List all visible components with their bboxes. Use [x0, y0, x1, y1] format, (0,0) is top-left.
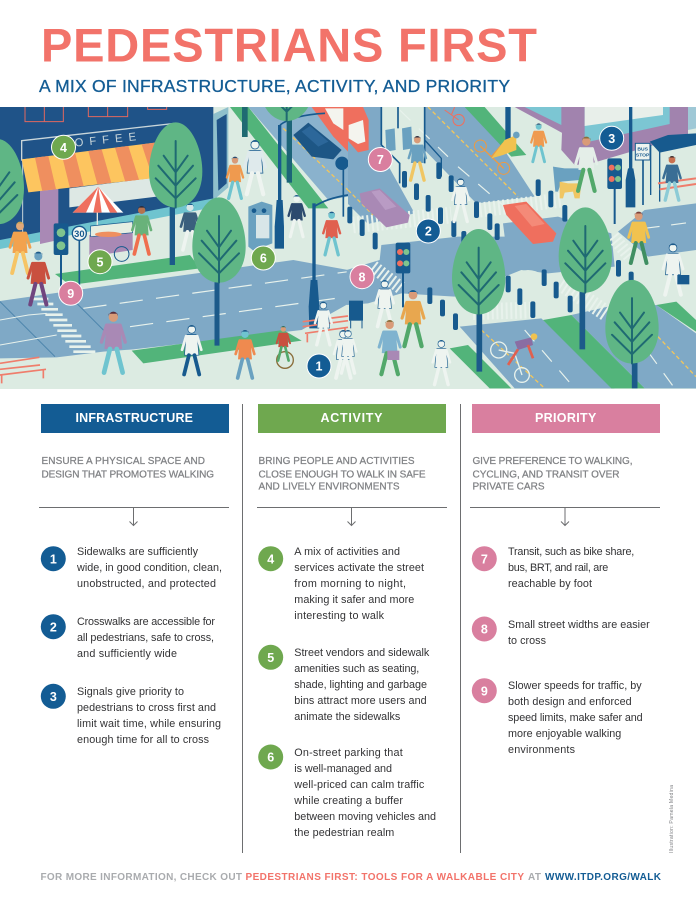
marker 2: 2: [425, 225, 432, 239]
bike share sign: [335, 157, 349, 217]
road lane markings: [83, 272, 348, 327]
orange bike and rider: [474, 132, 520, 174]
red bus front: [347, 107, 369, 152]
crosswalks: [353, 200, 630, 313]
activity description: BRING PEOPLE AND ACTIVITIES: [258, 456, 415, 467]
infrastructure heading: INFRASTRUCTURE: [76, 411, 193, 425]
marker 8: 8: [359, 270, 366, 284]
priority description: GIVE PREFERENCE TO WALKING,: [472, 456, 632, 467]
marker 8: [350, 265, 374, 289]
item 7: Transit, such as bike share,: [508, 546, 634, 558]
item 5: amenities such as seating,: [294, 663, 419, 675]
marker 6: 6: [260, 252, 267, 266]
parking meter: [248, 202, 272, 251]
item 6: is well-managed and: [294, 763, 392, 775]
item 7: reachable by foot: [508, 578, 592, 590]
illustration credit: Illustration: Pamela Medina: [669, 785, 675, 853]
item 7: 7: [481, 552, 488, 566]
item 6: 6: [267, 751, 274, 765]
footer: AT: [528, 872, 541, 883]
item 8: to cross: [508, 635, 547, 647]
outline man with bag: [182, 325, 201, 374]
man behind the tree: [181, 203, 199, 250]
sidewalk tree: [192, 197, 246, 346]
item 3: 3: [50, 690, 57, 704]
panel: activity: [257, 404, 447, 839]
item 5: [258, 645, 430, 723]
item 9: more enjoyable walking: [508, 728, 621, 740]
activity description: [258, 456, 426, 492]
woman in red dress: [323, 212, 340, 255]
item 1: 1: [50, 552, 57, 566]
item 4: interesting to walk: [294, 610, 385, 622]
outline pedestrian at edge: [334, 330, 353, 378]
activity arrow: [257, 508, 447, 526]
item 7: bus, BRT, and rail, are: [508, 562, 608, 574]
item 3: [41, 684, 221, 746]
marker 6: [251, 246, 275, 270]
transit station platform and fare gates: [385, 127, 412, 152]
item 7: [472, 546, 634, 590]
marker 5: [88, 250, 112, 274]
outline pedestrian on crossing: [452, 178, 469, 222]
item 2: 2: [50, 620, 57, 634]
left half of the street scene: [0, 36, 353, 383]
vendor in green apron: [132, 206, 151, 254]
footer: [40, 872, 662, 883]
item 2: Crosswalks are accessible for: [77, 616, 215, 628]
bus stop sign: BUS: [637, 146, 649, 152]
road markings: [348, 107, 696, 388]
marker 1: 1: [316, 360, 323, 374]
outline man with briefcase: [663, 243, 689, 295]
item 9: speed limits, make safer and: [508, 712, 643, 724]
outline pedestrian with backpack: [244, 140, 266, 194]
item 2: all pedestrians, safe to cross,: [77, 632, 214, 644]
benches: [0, 316, 348, 383]
item 3: pedestrians to cross first and: [77, 702, 216, 714]
bollards: [347, 162, 634, 330]
man in red jacket: [28, 252, 49, 304]
item 2: [41, 614, 215, 660]
outline woman by the bench: [315, 302, 332, 345]
panel: infrastructure: [39, 404, 229, 746]
priority heading: PRIORITY: [535, 411, 597, 425]
pedestrians on the right side: [340, 123, 689, 385]
striped awning: [22, 143, 167, 192]
outline pedestrian at left edge: [340, 330, 356, 373]
purple car: [360, 188, 410, 227]
pedestrian with backpack: [402, 290, 424, 346]
street illustration: [0, 107, 696, 389]
marker 3: [600, 126, 624, 150]
item 5: shade, lighting and garbage: [294, 679, 427, 691]
item 9: [472, 678, 643, 756]
subtitle: A MIX OF INFRASTRUCTURE, ACTIVITY, AND PRIORITY: [39, 76, 510, 96]
item 4: [258, 546, 424, 622]
woman in orange top: [227, 157, 243, 198]
sidewalk bulge at the intersection: [508, 270, 548, 303]
red car: [503, 202, 556, 244]
footer: PEDESTRIANS FIRST: TOOLS FOR A WALKABLE CITY: [246, 872, 524, 883]
item 1: unobstructed, and protected: [77, 578, 216, 590]
item 3: limit wait time, while ensuring: [77, 718, 221, 730]
item 4: services activate the street: [294, 562, 424, 574]
tree at left edge: [0, 139, 24, 224]
trees on the left side: [0, 36, 313, 346]
priority description: PRIVATE CARS: [472, 481, 545, 492]
streets: [347, 107, 696, 388]
bus lane continuation: [348, 107, 415, 224]
intersection tree: [452, 229, 505, 372]
priority heading: [472, 404, 660, 433]
green planting strips: [450, 107, 696, 388]
lower right tree: [605, 280, 659, 388]
marker 4: [52, 135, 76, 159]
item 6: between moving vehicles and: [294, 811, 436, 823]
east road: [618, 203, 696, 257]
marker 7: [368, 148, 392, 172]
man walking dogs: [576, 137, 597, 191]
item 5: bins attract more users and: [294, 695, 427, 707]
man seated at bus stop: [663, 156, 681, 200]
marker 7: 7: [377, 153, 384, 167]
trash bin: [349, 301, 363, 328]
lower right road: [571, 305, 696, 388]
woman in yellow coat: [629, 212, 649, 263]
marker 1: [307, 354, 331, 378]
item 6: the pedestrian realm: [294, 827, 394, 839]
crosswalk: [33, 299, 95, 352]
marker 3: 3: [608, 132, 615, 146]
diagonal street upper left: [248, 107, 348, 200]
item 8: [472, 616, 650, 647]
shop front tree: [149, 122, 202, 265]
item 6: On-street parking that: [294, 747, 403, 759]
panel: priority: [470, 404, 660, 756]
crossing tree: [559, 207, 612, 349]
woman with tote: [10, 222, 30, 273]
foreground cyclist: [491, 333, 537, 382]
item 5: animate the sidewalks: [294, 711, 401, 723]
green planting strips: [55, 107, 328, 363]
outline woman near signal: [376, 280, 394, 327]
item 5: Street vendors and sidewalk: [294, 647, 430, 659]
pedestrians on the left side: [10, 140, 353, 378]
traffic signal left: [54, 223, 68, 287]
purple corner building: [515, 107, 696, 165]
activity description: AND LIVELY ENVIRONMENTS: [258, 481, 400, 492]
marker 2: [416, 219, 440, 243]
activity heading: ACTIVITY: [320, 411, 383, 425]
red bus: [312, 107, 348, 152]
man with purple briefcase: [379, 320, 400, 374]
item 4: making it safer and more: [294, 594, 414, 606]
outline woman in foreground: [433, 340, 450, 385]
item 3: enough time for all to cross: [77, 734, 210, 746]
infrastructure description: [42, 456, 214, 480]
trees on the right side: [452, 207, 659, 388]
activity heading: [258, 404, 446, 433]
speed limit sign: [72, 226, 86, 285]
item 1: [41, 546, 222, 590]
title: PEDESTRIANS FIRST: [41, 18, 537, 72]
footer: WWW.ITDP.ORG/WALK: [545, 872, 662, 883]
item 4: 4: [267, 552, 274, 566]
bus shelter: [650, 133, 696, 202]
street vendor cart and umbrella: [73, 187, 133, 261]
woman in striped dress: [409, 136, 426, 180]
outline woman near meter: [289, 195, 305, 237]
item 6: while creating a buffer: [293, 795, 403, 807]
main cross street: [0, 260, 348, 358]
central intersection: [347, 217, 615, 305]
corner traffic signal: [607, 158, 622, 224]
item 9: 9: [481, 684, 488, 698]
item 4: A mix of activities and: [294, 546, 400, 558]
item 5: 5: [267, 651, 274, 665]
bus stop sign: [635, 143, 650, 205]
marker 5: 5: [97, 255, 104, 269]
priority description: [472, 456, 632, 492]
illustration number markers: [52, 126, 624, 378]
teal building base strip: [0, 197, 217, 249]
item 9: environments: [508, 744, 576, 756]
infrastructure arrow: [39, 508, 229, 526]
marker 4: 4: [60, 141, 67, 155]
lamp post: [626, 107, 635, 207]
dark parked car: [293, 123, 342, 159]
woman in long lavender coat: [101, 312, 125, 373]
item 8: 8: [481, 623, 488, 637]
activity description: CLOSE ENOUGH TO WALK IN SAFE: [258, 469, 426, 480]
pedestrian in orange vest: [236, 330, 254, 378]
street lamps: [242, 107, 348, 328]
wheelchair user: [277, 326, 293, 368]
coffee shop building: [0, 107, 228, 244]
priority arrow: [470, 508, 660, 526]
footer: FOR MORE INFORMATION, CHECK OUT: [40, 872, 242, 883]
central traffic signal: [396, 243, 410, 307]
item 1: wide, in good condition, clean,: [76, 562, 222, 574]
item 4: from morning to night,: [294, 578, 406, 590]
item 8: Small street widths are easier: [508, 619, 650, 631]
item 2: and sufficiently wide: [77, 648, 177, 660]
infrastructure heading: [41, 404, 229, 433]
item 6: [258, 744, 436, 839]
priority description: CYCLING, AND TRANSIT OVER: [472, 469, 620, 480]
woman in orange skirt: [531, 123, 546, 162]
item 3: Signals give priority to: [77, 686, 184, 698]
yellow dog: [560, 182, 581, 198]
infrastructure description: ENSURE A PHYSICAL SPACE AND: [42, 456, 205, 467]
item 9: Slower speeds for traffic, by: [508, 680, 642, 692]
item 9: both design and enforced: [508, 696, 632, 708]
right half of the street scene: [340, 107, 696, 388]
shop sign: OFFEE: [74, 131, 143, 150]
bus stop sign: STOP: [636, 153, 650, 159]
item 6: well-priced can calm traffic: [293, 779, 425, 791]
upper red bike: [445, 107, 464, 126]
top tree: [265, 107, 308, 183]
marker 9: [59, 281, 83, 305]
infrastructure description: DESIGN THAT PROMOTES WALKING: [42, 469, 214, 480]
speed limit sign: 30: [74, 229, 85, 239]
blue dog: [553, 167, 581, 192]
item 1: Sidewalks are sufficiently: [77, 546, 199, 558]
upper diagonal road: [425, 107, 535, 203]
marker 9: 9: [67, 287, 74, 301]
dogs: [553, 167, 581, 198]
lower diagonal road: [460, 318, 615, 388]
